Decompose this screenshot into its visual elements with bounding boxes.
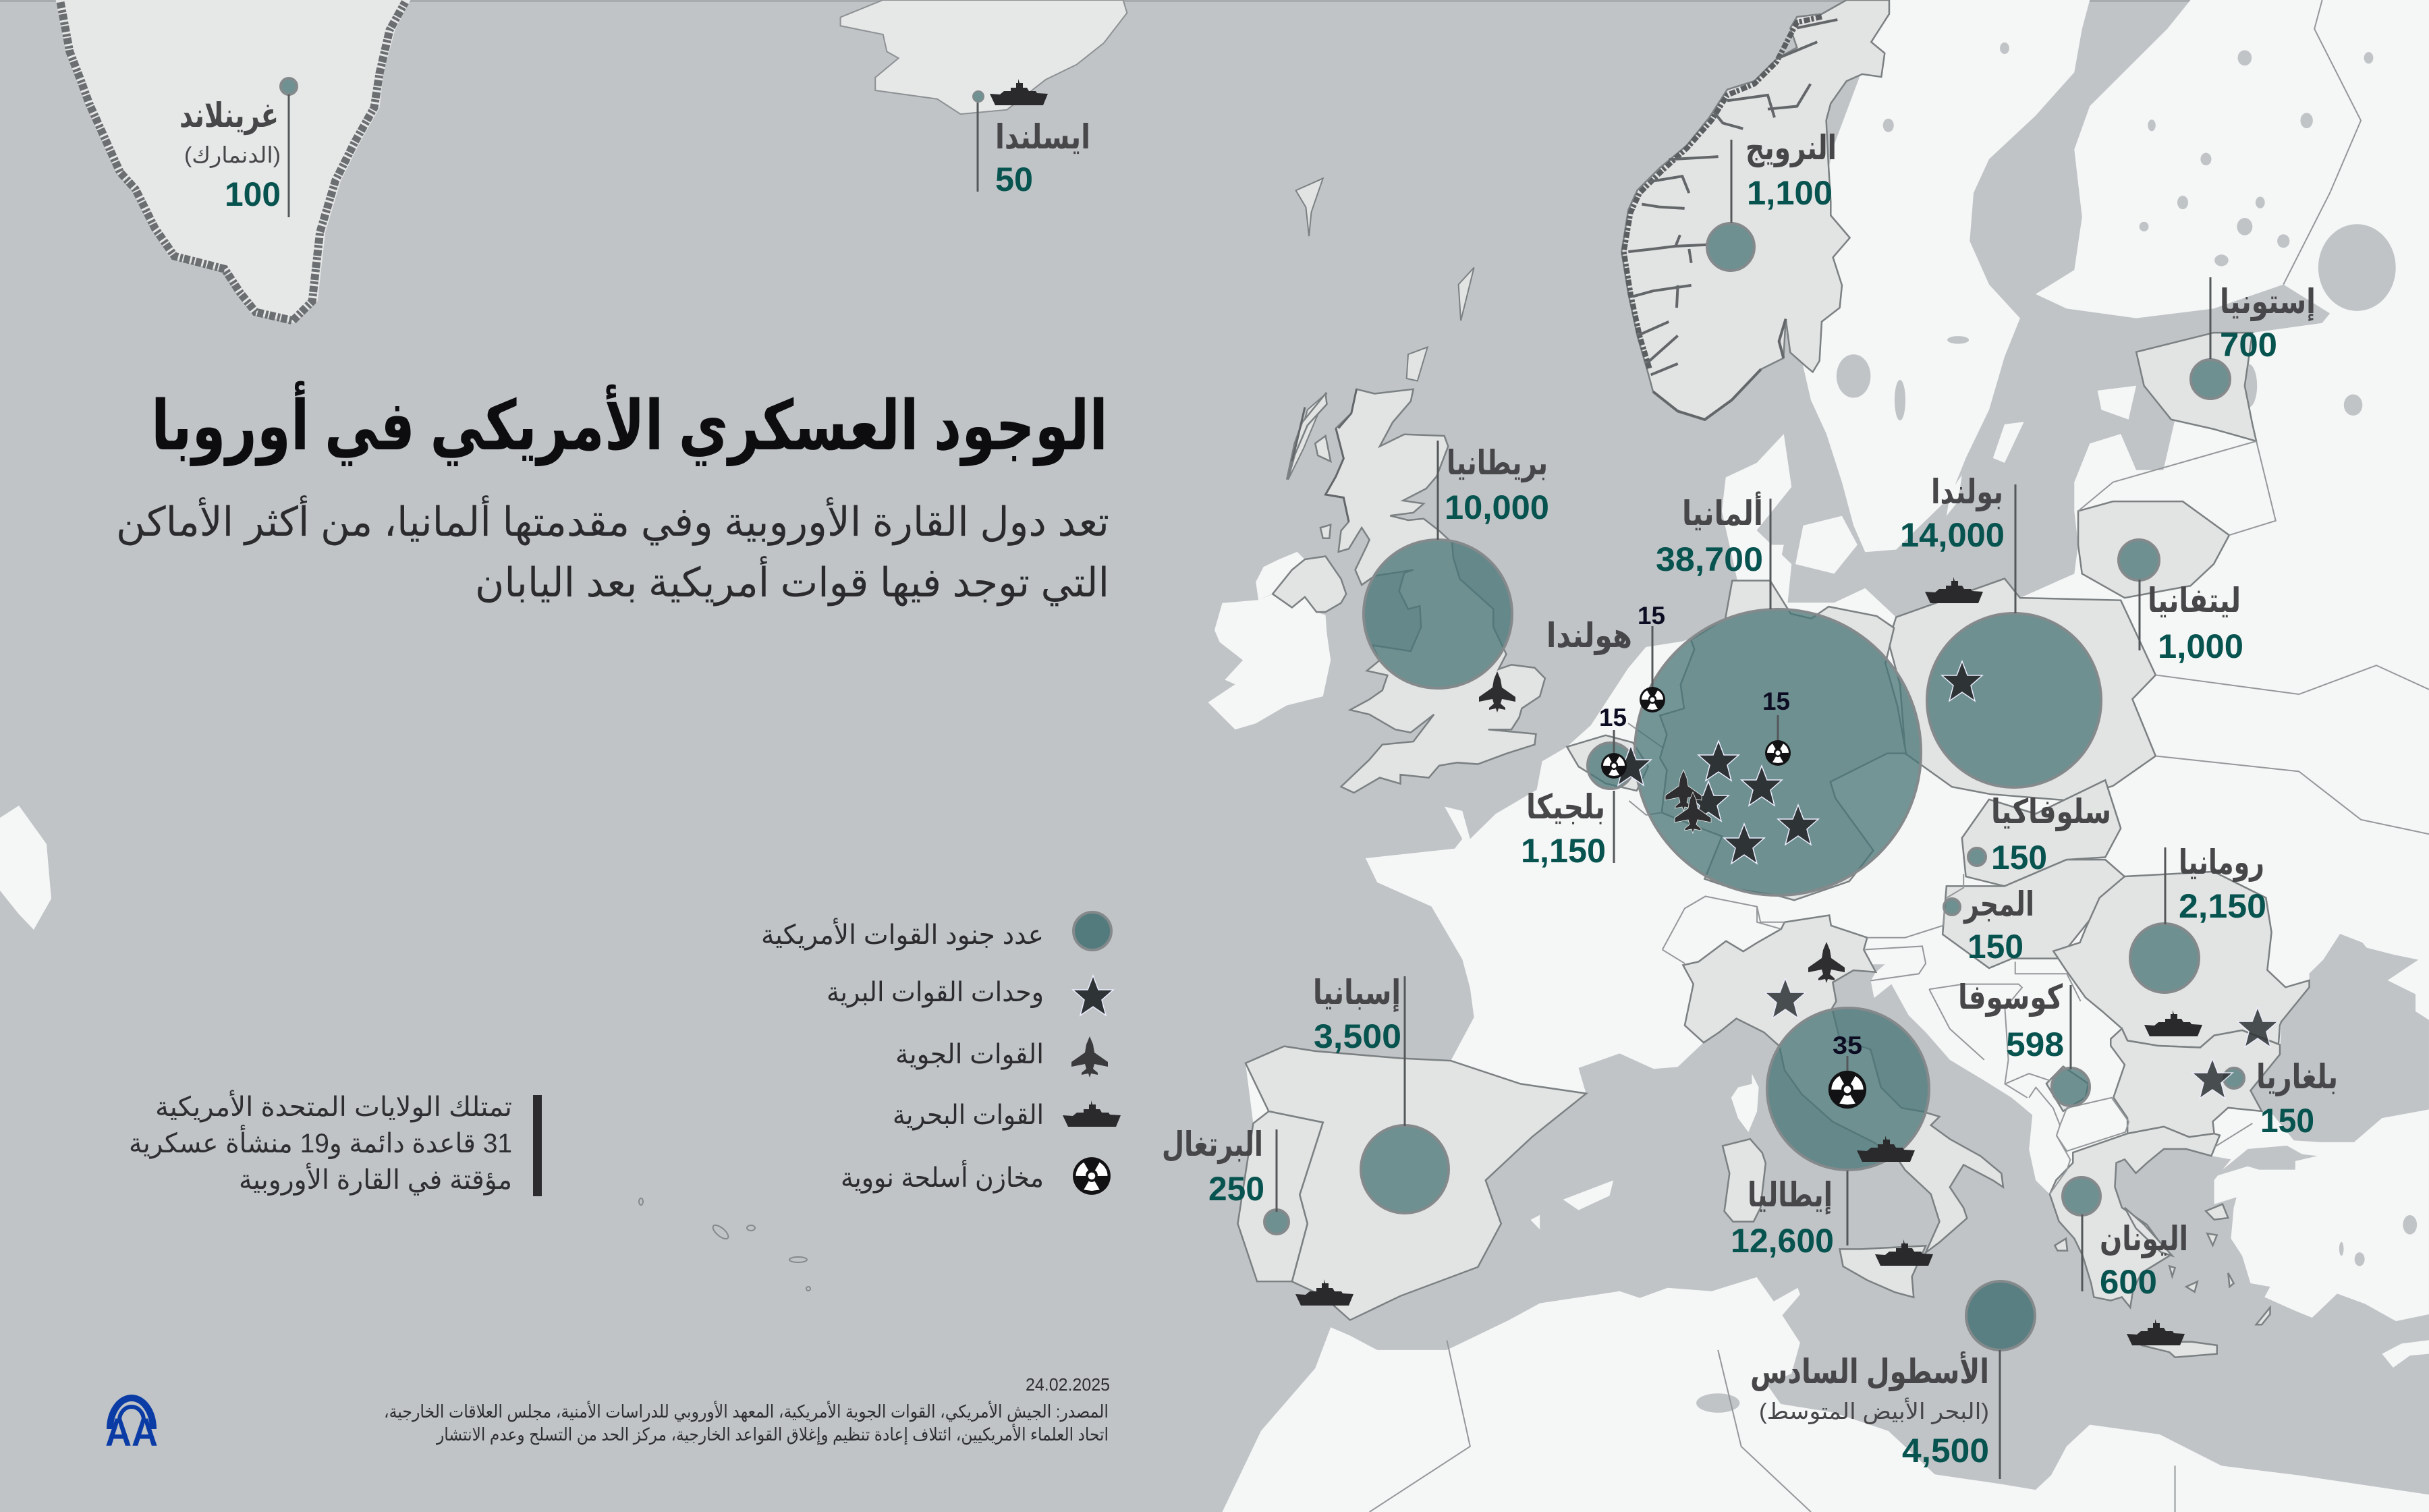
land: mainland	[1237, 0, 2429, 1321]
circle: UK	[1364, 540, 1512, 688]
borders of Alps and West Balkans	[1663, 874, 2129, 1194]
label: Norway: 1,100	[1747, 174, 1833, 212]
land: Balkans and Turkey	[1871, 946, 2429, 1321]
Hungary	[1943, 860, 2125, 968]
circle: Norway	[1707, 223, 1754, 271]
Belgium	[1567, 735, 1648, 791]
label: Hungary: 150	[1967, 928, 2023, 965]
grey highlighted countries	[1237, 333, 2256, 1320]
Lithuania	[2078, 501, 2229, 598]
label: Spain: 3,500	[1314, 1017, 1401, 1055]
label: Iceland	[978, 103, 1090, 198]
label: Belgium nuclear count	[1599, 704, 1627, 754]
label: United Kingdom	[1438, 441, 1549, 540]
circle: Kosovo	[2052, 1068, 2090, 1106]
label: Poland: بولندا	[1931, 473, 2003, 512]
label: Romania	[2165, 843, 2266, 925]
circle: Italy	[1767, 1008, 1929, 1170]
label: Slovakia: سلوفاكيا	[1991, 793, 2111, 832]
label: Romania: 2,150	[2179, 887, 2266, 925]
note: US bases: 31 قاعدة دائمة و19 منشأة عسكرية	[129, 1125, 512, 1159]
label: Italy: إيطاليا	[1748, 1176, 1833, 1215]
Ireland	[1208, 552, 1331, 729]
label: Greece	[2082, 1214, 2188, 1301]
label: Sixth Fleet: الأسطول السادس	[1750, 1351, 1989, 1392]
circle: Hungary	[1944, 899, 1960, 915]
legend: ground forces: وحدات القوات البرية	[827, 978, 1044, 1008]
circle: Lithuania	[2119, 540, 2159, 580]
footer: date and sources: اتحاد العلماء الأمريكيين، ائتلاف إعادة تنظيم وإغلاق القواعد الخارجية، مركز الحد من التسلح وعدم الانتشار	[435, 1423, 1109, 1445]
Norway	[1621, 0, 1889, 420]
Poland	[1889, 579, 2156, 800]
label: Estonia	[2210, 277, 2316, 364]
label: Italy nuclear count	[1833, 1032, 1862, 1071]
label: Romania: رومانيا	[2179, 843, 2264, 883]
circle: Greenland	[281, 78, 297, 94]
label: Iceland: 50	[995, 161, 1033, 198]
legend: troops: عدد جنود القوات الأمريكية	[761, 918, 1044, 951]
subtitle	[116, 495, 1109, 607]
label: Germany nuclear count: 15	[1762, 688, 1790, 715]
circle: Sixth Fleet	[1966, 1281, 2035, 1350]
label: Portugal: البرتغال	[1162, 1125, 1263, 1165]
small Atlantic islands	[0, 806, 810, 1291]
label: Spain: إسبانيا	[1313, 974, 1401, 1013]
icons: ground force stars	[1611, 661, 2278, 1098]
circle: Spain	[1361, 1125, 1449, 1213]
circle: Bulgaria	[2224, 1068, 2244, 1088]
land: Sweden	[1791, 0, 2090, 552]
label: Slovakia: 150	[1991, 839, 2047, 876]
circle: Germany	[1635, 609, 1921, 895]
circle: Slovakia	[1968, 848, 1986, 866]
label: Belgium nuclear count: 15	[1599, 704, 1627, 731]
label: Greenland: 100	[225, 175, 281, 213]
label: Bulgaria	[2256, 1058, 2338, 1140]
Italy	[1683, 916, 2003, 1297]
label: Belgium: 1,150	[1521, 832, 1606, 870]
label: Kosovo: كوسوفا	[1958, 978, 2063, 1017]
circle: Estonia	[2191, 360, 2230, 399]
Black Sea and Marmara	[2214, 934, 2429, 1266]
map of Europe and North Africa	[1208, 0, 2429, 1512]
label: Norway: النرويج	[1746, 129, 1837, 168]
label: Spain	[1313, 974, 1405, 1126]
label: Germany: 38,700	[1656, 540, 1763, 578]
Spain	[1246, 1046, 1586, 1320]
circle: Iceland	[973, 91, 984, 102]
land: North Africa	[1222, 1277, 2429, 1512]
legend: nuclear storage: مخازن أسلحة نووية	[841, 1160, 1044, 1194]
title: الوجود العسكري الأمريكي في أوروبا	[151, 381, 1108, 466]
Slovakia	[1962, 780, 2121, 886]
label: Greenland: (الدنمارك)	[184, 142, 281, 168]
note: US bases: مؤقتة في القارة الأوروبية	[239, 1163, 512, 1196]
icons: naval ships	[990, 79, 2202, 1345]
label: Sixth Fleet	[1750, 1350, 2000, 1479]
lakes	[1696, 43, 2396, 1413]
Romania, Bulgaria, Greece, Kosovo	[2046, 872, 2310, 1357]
note: US bases: تمتلك الولايات المتحدة الأمريكية	[155, 1090, 512, 1123]
label: Kosovo	[1958, 978, 2071, 1069]
label: Portugal	[1162, 1125, 1277, 1212]
footer: date and sources: المصدر: الجيش الأمريكي، القوات الجوية الأمريكية، المعهد الأوروبي للدراسات الأمنية، مجلس العلاقات الخارجية،	[384, 1400, 1109, 1422]
label: Iceland: ايسلندا	[995, 118, 1090, 156]
circle: Poland	[1927, 613, 2101, 787]
label: Belgium: بلجيكا	[1526, 788, 1605, 826]
label: Hungary	[1963, 885, 2034, 965]
legend: troops	[761, 912, 1111, 951]
circle: Romania	[2130, 924, 2199, 992]
circle: Greece	[2063, 1177, 2100, 1215]
label: Sixth Fleet: (البحر الأبيض المتوسط)	[1759, 1397, 1989, 1425]
icons: air force planes	[1479, 671, 1845, 983]
label: Bulgaria: 150	[2260, 1102, 2314, 1140]
label: Italy: 12,600	[1731, 1222, 1834, 1260]
label: Poland	[1900, 473, 2015, 613]
label: Lithuania: ليتفانيا	[2148, 582, 2241, 619]
label: Greenland	[179, 94, 289, 217]
note: US bases	[129, 1090, 542, 1196]
legend	[761, 912, 1121, 1195]
label: Germany	[1656, 491, 1770, 609]
label: Belgium	[1521, 788, 1614, 870]
label: Poland: 14,000	[1900, 516, 2005, 554]
label: Portugal: 250	[1208, 1170, 1264, 1208]
legend: air forces	[895, 1036, 1108, 1077]
Germany	[1629, 581, 1906, 900]
label: Lithuania	[2140, 580, 2243, 665]
legend: ground forces	[827, 976, 1113, 1015]
label: Estonia: 700	[2220, 326, 2277, 364]
label: United Kingdom: 10,000	[1445, 488, 1549, 526]
label: Greenland: غرينلاند	[179, 96, 279, 136]
legend: naval forces	[893, 1100, 1121, 1131]
label: Italy	[1731, 1171, 1847, 1260]
label: Germany: ألمانيا	[1682, 491, 1763, 532]
legend: air forces: القوات الجوية	[895, 1040, 1044, 1070]
label: Sixth Fleet: 4,500	[1902, 1432, 1989, 1469]
Portugal	[1237, 1111, 1323, 1281]
label: Netherlands	[1546, 602, 1665, 687]
Estonia	[2136, 333, 2256, 441]
United Kingdom	[1273, 389, 1545, 793]
label: United Kingdom: بريطانيا	[1447, 444, 1548, 483]
label: Norway	[1731, 129, 1837, 223]
subtitle: التي توجد فيها قوات أمريكية بعد اليابان	[475, 556, 1109, 607]
label: Hungary: المجر	[1963, 885, 2034, 924]
Corsica	[1731, 1073, 1759, 1132]
footer: date and sources: 24.02.2025	[1026, 1374, 1110, 1395]
circle: Belgium	[1588, 743, 1634, 789]
label: Bulgaria: بلغاريا	[2256, 1058, 2338, 1096]
label: Estonia: إستونيا	[2220, 283, 2316, 322]
label: Lithuania: 1,000	[2158, 627, 2243, 665]
legend: nuclear storage	[841, 1157, 1111, 1195]
label: Greece: اليونان	[2100, 1220, 2188, 1259]
islands	[1530, 386, 2136, 1229]
icons: nuclear storage	[1601, 687, 1866, 1109]
borders of other countries	[1370, 0, 2429, 1512]
footer: date and sources	[384, 1374, 1110, 1445]
Cyprus	[2382, 1340, 2429, 1368]
circle: Portugal	[1264, 1210, 1289, 1234]
label: Greece: 600	[2100, 1263, 2157, 1301]
label: Netherlands: 15	[1638, 602, 1665, 629]
label: Slovakia	[1991, 793, 2111, 876]
label: Kosovo: 598	[2006, 1026, 2064, 1063]
label: Netherlands: هولندا	[1546, 617, 1632, 656]
label: Italy nuclear count: 35	[1833, 1032, 1862, 1059]
map of Greenland and Iceland	[56, 0, 1127, 323]
label: Germany nuclear count	[1762, 688, 1790, 740]
subtitle: تعد دول القارة الأوروبية وفي مقدمتها ألمانيا، من أكثر الأماكن	[116, 495, 1109, 546]
logo: Anadolu Agency: AA	[105, 1411, 158, 1455]
legend: naval forces: القوات البحرية	[893, 1100, 1044, 1131]
Atlantic islets	[1288, 178, 1474, 480]
